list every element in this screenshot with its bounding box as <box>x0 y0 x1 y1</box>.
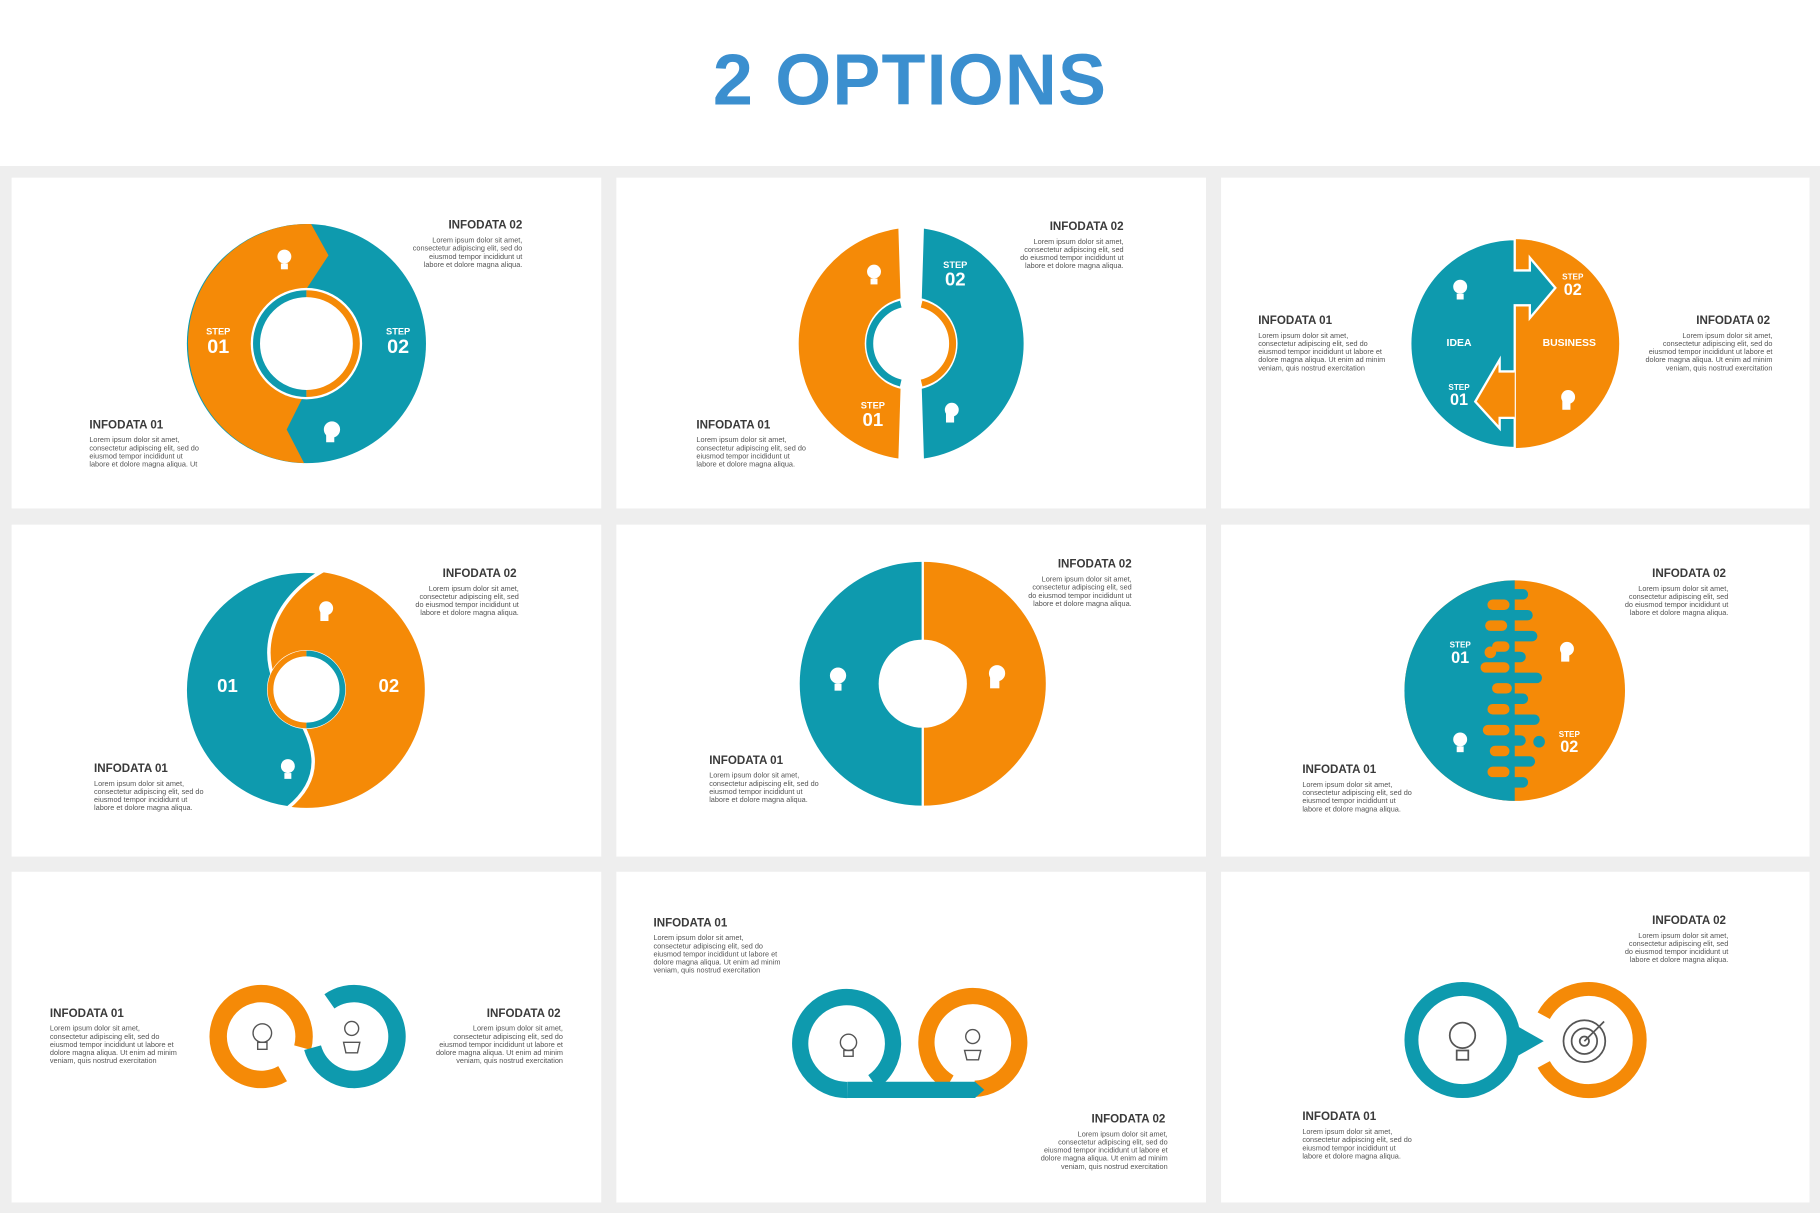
panel: p4: labore et dolore magna aliqua. <box>94 803 193 812</box>
panel: p4: consectetur adipiscing elit, sed do <box>94 787 204 796</box>
panel: p5: Lorem ipsum dolor sit amet, <box>1042 575 1132 584</box>
panel: p2: 01 <box>863 409 883 430</box>
panel: p2: eiusmod tempor incididunt ut <box>696 452 790 461</box>
panel: p3: veniam, quis nostrud exercitation <box>1666 363 1772 372</box>
panel: p3: 02 <box>1564 281 1582 299</box>
panel: p7: veniam, quis nostrud exercitation <box>456 1056 563 1065</box>
panel: p3: 01 <box>1450 391 1468 409</box>
panel: p2: STEP <box>861 401 885 411</box>
panel: p7: INFODATA 02 <box>487 1007 561 1020</box>
panel: p7: INFODATA 01 <box>50 1007 124 1020</box>
panel: p7: eiusmod tempor incididunt ut labore et <box>439 1040 563 1049</box>
panel: p8: eiusmod tempor incididunt ut labore et <box>1044 1146 1168 1155</box>
panel: p4: 01 <box>217 675 238 696</box>
panel: p3: Lorem ipsum dolor sit amet, <box>1258 331 1348 340</box>
panel: p8: Lorem ipsum dolor sit amet, <box>1078 1129 1168 1138</box>
panel: p7: dolore magna aliqua. Ut enim ad minim <box>436 1048 563 1057</box>
panel: p9 <box>1221 872 1810 1203</box>
panel: p9: INFODATA 02 <box>1652 914 1726 927</box>
panel: p2: INFODATA 01 <box>696 418 771 431</box>
panel: p6: INFODATA 02 <box>1652 567 1726 580</box>
panel: p1: INFODATA 02 <box>448 219 522 232</box>
panel: p4: Lorem ipsum dolor sit amet, <box>94 779 184 788</box>
panel: p6: STEP <box>1559 730 1580 739</box>
panel: p3: BUSINESS <box>1543 338 1596 349</box>
panel: p7: consectetur adipiscing elit, sed do <box>50 1032 159 1041</box>
panel: p5: Lorem ipsum dolor sit amet, <box>709 771 799 780</box>
panel: p4: consectetur adipiscing elit, sed <box>419 592 519 601</box>
panel: p7: veniam, quis nostrud exercitation <box>50 1056 157 1065</box>
panel: p8: eiusmod tempor incididunt ut labore et <box>653 949 777 958</box>
panel: p6: eiusmod tempor incididunt ut <box>1302 796 1396 805</box>
panel: p9: eiusmod tempor incididunt ut <box>1302 1143 1396 1152</box>
panel: p7: dolore magna aliqua. Ut enim ad minim <box>50 1048 177 1057</box>
panel: p8: consectetur adipiscing elit, sed do <box>653 941 763 950</box>
panel: p4 <box>12 525 601 857</box>
panel: p5: consectetur adipiscing elit, sed <box>1032 583 1132 592</box>
panel: p8: veniam, quis nostrud exercitation <box>653 966 760 975</box>
panel: p5: labore et dolore magna aliqua. <box>1033 599 1132 608</box>
panel: p4: INFODATA 01 <box>94 762 168 775</box>
panel: p2: do eiusmod tempor incididunt ut <box>1020 253 1124 262</box>
panel: p3: consectetur adipiscing elit, sed do <box>1663 339 1772 348</box>
panel: p1: STEP <box>206 326 230 336</box>
panel: p6: do eiusmod tempor incididunt ut <box>1625 600 1728 609</box>
panel: p5 <box>616 525 1206 857</box>
panel: p9: consectetur adipiscing elit, sed <box>1629 939 1728 948</box>
panel: p7 <box>12 872 601 1203</box>
panel: p1: labore et dolore magna aliqua. <box>424 260 522 269</box>
panel: p3: IDEA <box>1447 338 1472 349</box>
panel: p6: INFODATA 01 <box>1302 763 1377 776</box>
panel: p6 <box>1221 525 1810 857</box>
panel: p4: Lorem ipsum dolor sit amet, <box>429 584 519 593</box>
panel: p1: consectetur adipiscing elit, sed do <box>89 443 199 452</box>
panel: p7: consectetur adipiscing elit, sed do <box>453 1032 563 1041</box>
panel: p8: dolore magna aliqua. Ut enim ad minim <box>1041 1154 1168 1163</box>
panel: p6: Lorem ipsum dolor sit amet, <box>1638 584 1728 593</box>
panel: p4: eiusmod tempor incididunt ut <box>94 795 187 804</box>
panel: p6: 02 <box>1560 738 1578 756</box>
panel: p9: Lorem ipsum dolor sit amet, <box>1302 1127 1392 1136</box>
panel: p3: dolore magna aliqua. Ut enim ad minim <box>1645 355 1772 364</box>
panel: p5: INFODATA 01 <box>709 754 784 767</box>
panel: p6: 01 <box>1451 649 1469 667</box>
panel: p6: labore et dolore magna aliqua. <box>1302 804 1401 813</box>
title: 2 OPTIONS <box>713 40 1107 120</box>
panel: p3: STEP <box>1562 273 1584 282</box>
panel: p6: STEP <box>1450 641 1471 650</box>
panel: p2: STEP <box>943 260 967 270</box>
panel: p1: Lorem ipsum dolor sit amet, <box>432 236 522 245</box>
panel: p2 <box>616 178 1206 508</box>
panel: p1: eiusmod tempor incididunt ut <box>429 252 522 261</box>
panel: p2: consectetur adipiscing elit, sed <box>1024 245 1124 254</box>
panel: p1: 02 <box>387 336 409 358</box>
panel: p9: INFODATA 01 <box>1302 1110 1377 1123</box>
panel: p3: veniam, quis nostrud exercitation <box>1258 363 1365 372</box>
panel: p1: eiusmod tempor incididunt ut <box>89 452 183 461</box>
panel: p5: consectetur adipiscing elit, sed do <box>709 779 819 788</box>
panel: p2: labore et dolore magna aliqua. <box>696 460 795 469</box>
panel: p1: consectetur adipiscing elit, sed do <box>413 244 522 253</box>
panel: p3: STEP <box>1448 383 1470 392</box>
panel: p6: consectetur adipiscing elit, sed do <box>1302 788 1412 797</box>
panel: p3: eiusmod tempor incididunt ut labore et <box>1649 347 1772 356</box>
panel: p6: consectetur adipiscing elit, sed <box>1629 592 1728 601</box>
panel: p1: INFODATA 01 <box>89 418 164 431</box>
panel: p2: labore et dolore magna aliqua. <box>1025 261 1124 270</box>
panel: p6: Lorem ipsum dolor sit amet, <box>1302 780 1392 789</box>
panel: p2: Lorem ipsum dolor sit amet, <box>1034 237 1124 246</box>
panel: p7: Lorem ipsum dolor sit amet, <box>473 1024 563 1033</box>
panel: p4: labore et dolore magna aliqua. <box>420 608 519 617</box>
panel: p1: labore et dolore magna aliqua. Ut <box>89 460 197 469</box>
panel: p7: Lorem ipsum dolor sit amet, <box>50 1024 140 1033</box>
panel: p1 <box>12 178 601 508</box>
panel: p3: Lorem ipsum dolor sit amet, <box>1682 331 1772 340</box>
panel: p8: INFODATA 01 <box>653 916 728 929</box>
panel: p5: INFODATA 02 <box>1058 558 1132 571</box>
panel: p4: 02 <box>379 675 399 696</box>
panel: p3: INFODATA 02 <box>1696 314 1770 327</box>
panel: p5: labore et dolore magna aliqua. <box>709 795 808 804</box>
panel: p2: consectetur adipiscing elit, sed do <box>696 443 806 452</box>
panel: p1: 01 <box>207 336 229 358</box>
panel: p9: labore et dolore magna aliqua. <box>1630 955 1728 964</box>
panel: p7: eiusmod tempor incididunt ut labore et <box>50 1040 174 1049</box>
panel: p8: consectetur adipiscing elit, sed do <box>1058 1137 1168 1146</box>
panel: p3: eiusmod tempor incididunt ut labore et <box>1258 347 1382 356</box>
panel: p2: INFODATA 02 <box>1050 220 1124 233</box>
panel: p5: eiusmod tempor incididunt ut <box>709 787 802 796</box>
panel: p6: labore et dolore magna aliqua. <box>1630 608 1728 617</box>
panel: p1: STEP <box>386 326 410 336</box>
panel: p8: dolore magna aliqua. Ut enim ad minim <box>653 958 780 967</box>
panel: p8 <box>616 872 1206 1203</box>
panel: p9: do eiusmod tempor incididunt ut <box>1625 947 1728 956</box>
panel: p4: do eiusmod tempor incididunt ut <box>415 600 519 609</box>
panel: p3: dolore magna aliqua. Ut enim ad minim <box>1258 355 1385 364</box>
panel: p3 <box>1221 178 1810 508</box>
panel: p3: INFODATA 01 <box>1258 314 1333 327</box>
panel: p2: Lorem ipsum dolor sit amet, <box>696 435 786 444</box>
panel: p8: veniam, quis nostrud exercitation <box>1061 1162 1168 1171</box>
panel: p8: INFODATA 02 <box>1091 1112 1165 1125</box>
panel: p4: INFODATA 02 <box>443 567 517 580</box>
panel: p2: 02 <box>945 269 966 290</box>
panel: p5: do eiusmod tempor incididunt ut <box>1028 591 1132 600</box>
panel: p1: Lorem ipsum dolor sit amet, <box>89 435 179 444</box>
panel: p9: consectetur adipiscing elit, sed do <box>1302 1135 1412 1144</box>
panel: p9: labore et dolore magna aliqua. <box>1302 1151 1401 1160</box>
panel: p3: consectetur adipiscing elit, sed do <box>1258 339 1368 348</box>
panel: p8: Lorem ipsum dolor sit amet, <box>653 933 744 942</box>
panel: p9: Lorem ipsum dolor sit amet, <box>1638 931 1728 940</box>
